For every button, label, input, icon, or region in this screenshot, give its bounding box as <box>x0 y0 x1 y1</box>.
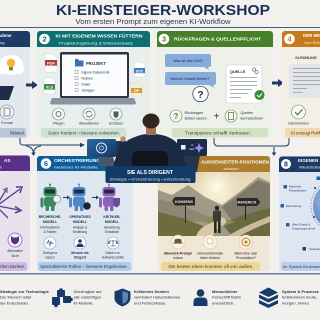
model labels: MODELL <box>105 220 119 224</box>
panel 6 header: ORCHESTRIERUNG <box>54 158 101 163</box>
takeaway: human finishing <box>212 289 241 305</box>
banner: you as the conductor <box>106 166 196 183</box>
panel 5 header: n <box>0 166 2 170</box>
takeaway: strategy: der Entscheider. <box>0 300 29 305</box>
icon: alternative view: Alternative <box>7 249 23 253</box>
laptop: right screen <box>176 139 207 172</box>
title: Vom ersten Prompt zum eigenen KI-Workflow <box>76 17 231 26</box>
panel 1 footer: hlüssel. <box>10 130 25 135</box>
panel 5 footer: chen Denken. <box>0 264 26 269</box>
icon: XLS file: XLS <box>46 86 54 90</box>
laptop: project: PROJEKT <box>86 61 106 66</box>
model labels: RECHERCHE- <box>39 215 61 219</box>
signpost: consensus: KONSENS <box>175 200 193 204</box>
icon: dark laptop <box>0 86 14 100</box>
takeaway: transferable: alle zukünftigen <box>74 295 101 300</box>
landscape image with signposts <box>158 166 270 236</box>
connector: left flow into row two <box>20 138 85 156</box>
icon: system stack <box>259 288 278 308</box>
icon row: maintain, update, protect: Aktualisieren <box>79 122 99 126</box>
arrow: 1 to 2 <box>26 81 38 89</box>
panel 7 footer: Die besten Ideen kommen oft von außen. <box>168 264 254 269</box>
follow-up questions item: Rückfragen <box>184 111 203 115</box>
source document: QUELLE <box>230 70 246 74</box>
icon: lightbulb in cloud <box>0 55 24 75</box>
icon row: maverick, unconventional, provocation: Ideen fördern <box>200 256 220 260</box>
model labels: MODELL <box>43 220 57 224</box>
icon row: divergence, conductor, benefit: Aufwand prüfen <box>102 256 124 260</box>
workflow steps: Einordnung <box>286 204 302 208</box>
workflow steps: Perspektiven <box>289 188 307 192</box>
chat bubble: details: Welche Details fehlen? <box>171 77 209 81</box>
baton <box>120 122 132 139</box>
panel 2 header: Projektumgebung & Wissensbasis <box>59 40 133 45</box>
arrow: operative to critic <box>92 196 99 200</box>
panel 6 header <box>37 156 106 171</box>
model labels: KRITIKER- <box>103 215 121 219</box>
panel 1 header: ahme <box>0 33 12 38</box>
panel 1 <box>0 31 30 138</box>
icon: folder <box>75 59 84 66</box>
panel 3 header: RÜCKFRAGEN & QUELLENPFLICHT <box>174 36 261 41</box>
panel 2 header: KI MIT EIGENEM WISSEN FÜTTERN <box>56 34 142 39</box>
model labels: Bewertung <box>104 226 120 230</box>
follow-up questions item <box>170 110 207 122</box>
icon row: divergence, conductor, benefit: Divergenz <box>43 251 58 255</box>
icon row: maverick, unconventional, provocation: Maverick-Prompt <box>164 252 193 256</box>
icon row: maverick, unconventional, provocation: Blind-Idee oder <box>234 252 258 256</box>
model labels: Erstellung <box>73 230 87 234</box>
panel 5 header: AS <box>4 158 10 163</box>
panel 4 header <box>282 31 320 47</box>
panel 6 footer: Spezialisierte Rollen – bessere Ergebnisse. <box>40 264 128 269</box>
panel 2 footer: Guter Kontext = bessere Antworten. <box>48 130 120 135</box>
icon: PDF file: PDF <box>47 61 56 66</box>
radiating idea arrows <box>0 187 22 218</box>
panel 3 <box>157 31 273 138</box>
panel 4 <box>282 31 320 138</box>
checklist: Notizen <box>82 76 93 80</box>
arrow: 3 to 4 <box>272 79 284 87</box>
takeaway: critical thinking: und Fehlschlüsse. <box>134 300 166 305</box>
icon: alternative view: Sicht <box>11 254 19 258</box>
banner: you as the conductor: Strategie • Orchestrierung • Entscheidung <box>110 178 190 182</box>
workflow steps: Gegenargumente <box>292 226 316 230</box>
icon: alternative view <box>7 233 23 258</box>
checklist: Daten <box>82 82 90 86</box>
checklist: Vorlagen <box>82 88 95 92</box>
arrow: research to operative <box>63 196 70 200</box>
model labels: Analyse & <box>73 226 88 230</box>
checklist <box>75 70 110 92</box>
takeaway: transferable: Übertragbar auf <box>74 289 102 294</box>
connector: right flow into row two <box>214 138 289 156</box>
panel 7 header: zulassen <box>223 166 239 171</box>
takeaway: critical thinking <box>134 289 180 305</box>
icon row: maintain, update, protect: Schützen <box>109 122 123 126</box>
icon: format: Format <box>1 121 13 125</box>
takeaway: human finishing: Feinschliff bleibt <box>212 295 241 300</box>
icon row: divergence, conductor, benefit: Dirigent <box>74 256 87 260</box>
panel 2 header: 2 <box>42 35 47 44</box>
icon row: divergence, conductor, benefit <box>43 237 124 260</box>
takeaway: strategy: Strategie vor Technologie <box>0 289 50 294</box>
icon row: maverick, unconventional, provocation: nutzen <box>173 256 183 260</box>
panel 2 header <box>37 31 150 47</box>
follow-up questions item: ? <box>174 112 179 121</box>
signpost: maverick: MAVERICK <box>238 200 257 204</box>
icon row: maverick, unconventional, provocation <box>164 235 258 260</box>
workflow steps <box>280 176 320 251</box>
takeaway: system and process: funktionieren heute, <box>282 295 317 300</box>
icon: DOC file: DOC <box>136 69 144 73</box>
takeaway: system and process <box>282 289 320 305</box>
model labels: Einwände <box>105 230 119 234</box>
takeaway: system and process: morgen, immer. <box>282 300 310 305</box>
panel 8 <box>279 156 320 271</box>
model labels: & Fakten <box>44 230 57 234</box>
title: KI-EINSTEIGER-WORKSHOP <box>56 2 270 19</box>
panel 7 header: AUSSENSEITER-POSITIONEN <box>201 160 270 164</box>
footer strip <box>0 274 320 320</box>
workflow steps: Maverick- <box>289 184 302 188</box>
panel 8 header <box>279 156 320 172</box>
cite sources item: Quellen <box>240 111 253 115</box>
follow-up questions item: stellen lassen <box>184 116 207 120</box>
cite sources item: kennzeichnen <box>240 116 263 120</box>
panel 3 header: 3 <box>162 35 166 44</box>
panel 3 footer: Transparenz schafft Vertrauen. <box>185 130 251 135</box>
takeaway: system and process: System & Prozesse <box>282 289 320 294</box>
takeaway: strategy: Der Mensch leitet <box>0 295 32 300</box>
cite sources item <box>225 110 263 122</box>
robot: critic model <box>99 184 120 211</box>
icon row: divergence, conductor, benefit: lassen <box>45 256 55 260</box>
icon row: divergence, conductor, benefit: Nutzen vs. <box>105 251 121 255</box>
second monitor behind conductor <box>116 141 126 161</box>
laptop: right screen: Data <box>189 148 195 151</box>
panel 5 <box>0 155 30 271</box>
conductor body <box>113 134 187 167</box>
icon: shield <box>114 288 130 306</box>
bottom divider <box>0 273 320 274</box>
chair back <box>132 151 168 168</box>
raised arm and hand <box>115 136 128 165</box>
takeaway: transferable <box>74 289 102 305</box>
model labels: Informationen <box>40 226 60 230</box>
takeaway: human finishing: Menschlicher <box>212 289 238 294</box>
title <box>56 2 270 26</box>
panel 5 header <box>0 156 30 171</box>
hiker <box>213 206 221 233</box>
raw draft document: KI-ROHLING <box>295 56 317 60</box>
plus: + <box>214 112 220 122</box>
icon row: maintain, update, protect: Pflegen <box>53 122 64 126</box>
model labels: MODELL <box>73 220 87 224</box>
panel 7 header <box>197 156 270 172</box>
panel 8 header: EIGENEN <box>298 158 318 163</box>
panel 6 header: 6 <box>44 159 48 168</box>
robot: operative model <box>69 184 91 211</box>
panel 4 header: 4 <box>287 35 292 44</box>
icon row: divergence, conductor, benefit: Mensch als <box>71 251 89 255</box>
icon: puzzle <box>52 288 73 307</box>
panel 6 <box>37 156 133 271</box>
panel 6 header: mehrerer KI-Modelle <box>54 164 98 170</box>
model labels <box>39 215 121 234</box>
robot: research model <box>40 184 61 211</box>
central conductor figure <box>87 114 207 172</box>
laptop: right screen: AI <box>191 144 194 147</box>
icon: question mark: ? <box>197 89 204 101</box>
icon row: maintain, update, protect <box>52 108 123 126</box>
icon: person <box>194 289 208 306</box>
panel 7 <box>158 156 270 271</box>
workflow steps: Was-Check & <box>292 222 310 226</box>
workflow globe <box>311 179 320 233</box>
panel 2 <box>37 31 150 138</box>
chat bubble: goal: Was ist dein Ziel? <box>173 59 203 63</box>
takeaway: transferable: KI-Modelle. <box>74 300 94 305</box>
banner: you as the conductor: SIE ALS DIRIGENT <box>127 170 173 176</box>
icon row: maverick, unconventional, provocation: Unkonventionelle <box>197 252 223 256</box>
checklist: Eigene Dokumente <box>82 70 110 74</box>
laptop: project <box>50 52 136 104</box>
icon: verified check <box>254 90 264 100</box>
model labels: OPERATIVES <box>69 215 92 219</box>
takeaway: strategy <box>0 289 50 305</box>
takeaway: critical thinking: Kritisches Denken <box>134 289 169 294</box>
conductor head <box>142 114 160 135</box>
takeaway: critical thinking: verhindert Halluzinationen <box>134 295 180 300</box>
takeaway: human finishing: unersetzlich. <box>212 300 234 305</box>
panel 1 header: ng <box>0 40 4 45</box>
laptop: left screen <box>87 139 116 166</box>
icon: ZIP file: ZIP <box>134 89 140 93</box>
icon: accept check: Übernehmen <box>288 122 309 126</box>
panel 1 header <box>0 31 30 47</box>
icon row: maverick, unconventional, provocation: Provokation? <box>236 256 256 260</box>
panel 3 header <box>157 31 273 47</box>
panel 8 header: 8 <box>284 162 288 169</box>
